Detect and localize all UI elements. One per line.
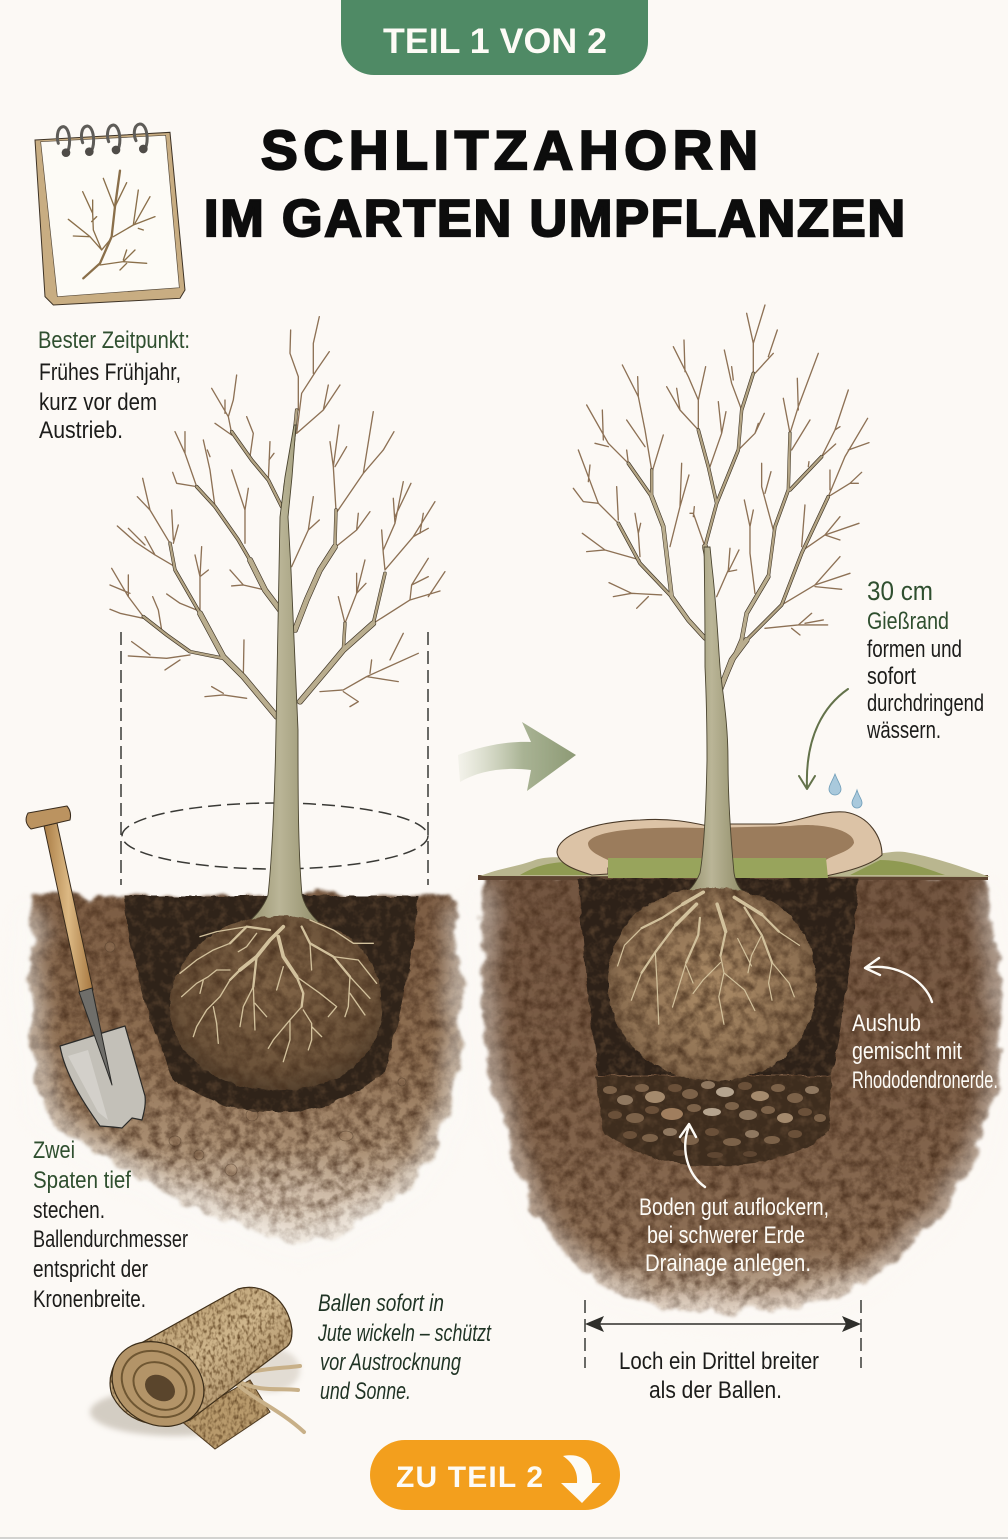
text: best time — [38, 327, 190, 444]
text: watering rim: sofort — [867, 663, 916, 690]
text: watering rim: formen und — [867, 636, 962, 663]
text: loosen soil: Drainage anlegen. — [645, 1250, 811, 1277]
text: hole width: als der Ballen. — [649, 1377, 782, 1404]
left roots — [180, 920, 377, 1062]
text: dig depth: stechen. — [33, 1197, 105, 1224]
button: zu Teil 2: ZU TEIL 2 — [396, 1461, 543, 1494]
arrow: to watering rim — [799, 689, 848, 789]
icon: water drops — [829, 774, 862, 808]
icon: jute roll — [90, 1287, 304, 1449]
title: SCHLITZAHORN — [261, 119, 758, 181]
text: excavated soil: Aushub — [852, 1010, 921, 1037]
text: dig depth: Zwei — [33, 1137, 75, 1164]
dashed crown width guide — [121, 632, 428, 885]
title: IM GARTEN UMPFLANZEN — [204, 190, 905, 248]
soil pebbles — [105, 916, 936, 1215]
left soil section — [29, 896, 460, 1244]
arrow: excavated soil — [865, 958, 932, 1002]
text: loosen soil: Boden gut auflockern, — [639, 1194, 829, 1221]
right hole — [578, 878, 858, 1075]
arrow: transition — [458, 722, 576, 791]
text: watering rim — [866, 576, 984, 744]
right trunk — [680, 547, 750, 912]
right soil section — [478, 860, 1001, 1313]
text: dig depth — [33, 1137, 188, 1313]
text: dig depth: Kronenbreite. — [33, 1286, 146, 1313]
text: watering rim: wässern. — [866, 717, 941, 744]
text: jute wrap: Jute wickeln – schützt — [317, 1320, 492, 1347]
text: hole width — [619, 1348, 819, 1404]
grass and watering rim — [480, 812, 990, 878]
left trunk — [238, 425, 330, 945]
left tree crown — [110, 317, 445, 717]
text: dig depth: Ballendurchmesser — [33, 1226, 188, 1253]
arrow: loosen soil — [680, 1124, 705, 1187]
text: dig depth: Spaten tief — [33, 1167, 131, 1194]
text: jute wrap: und Sonne. — [320, 1378, 411, 1405]
button: zu Teil 2 — [370, 1440, 620, 1510]
text: excavated soil — [852, 1010, 998, 1094]
text: loosen soil — [639, 1194, 829, 1277]
text: watering rim: Gießrand — [867, 608, 949, 635]
right root ball — [608, 888, 816, 1081]
text: jute wrap — [317, 1290, 492, 1405]
text: jute wrap: vor Austrocknung — [320, 1349, 461, 1376]
banner: Teil 1 von 2: TEIL 1 VON 2 — [383, 22, 607, 61]
text: best time: kurz vor dem — [39, 389, 157, 416]
planting hole dark — [124, 896, 418, 1112]
right roots — [618, 892, 799, 1024]
icon: notebook with twig — [35, 124, 185, 305]
title — [204, 119, 905, 248]
banner: Teil 1 von 2 — [341, 0, 648, 75]
icon: spade — [26, 806, 145, 1128]
right tree crown — [573, 305, 869, 690]
drainage layer — [596, 1076, 832, 1166]
text: best time: Frühes Frühjahr, — [39, 359, 181, 386]
left root ball — [170, 916, 382, 1090]
text: hole width: Loch ein Drittel breiter — [619, 1348, 819, 1375]
text: watering rim: 30 cm — [867, 576, 933, 606]
text: loosen soil: bei schwerer Erde — [647, 1222, 805, 1249]
text: dig depth: entspricht der — [33, 1256, 148, 1283]
dimension: hole width — [585, 1300, 861, 1368]
text: excavated soil: gemischt mit — [852, 1038, 962, 1065]
text: best time: Austrieb. — [39, 417, 123, 444]
text: best time: Bester Zeitpunkt: — [38, 327, 190, 354]
text: jute wrap: Ballen sofort in — [318, 1290, 444, 1317]
icon: curved down arrow — [561, 1455, 601, 1503]
